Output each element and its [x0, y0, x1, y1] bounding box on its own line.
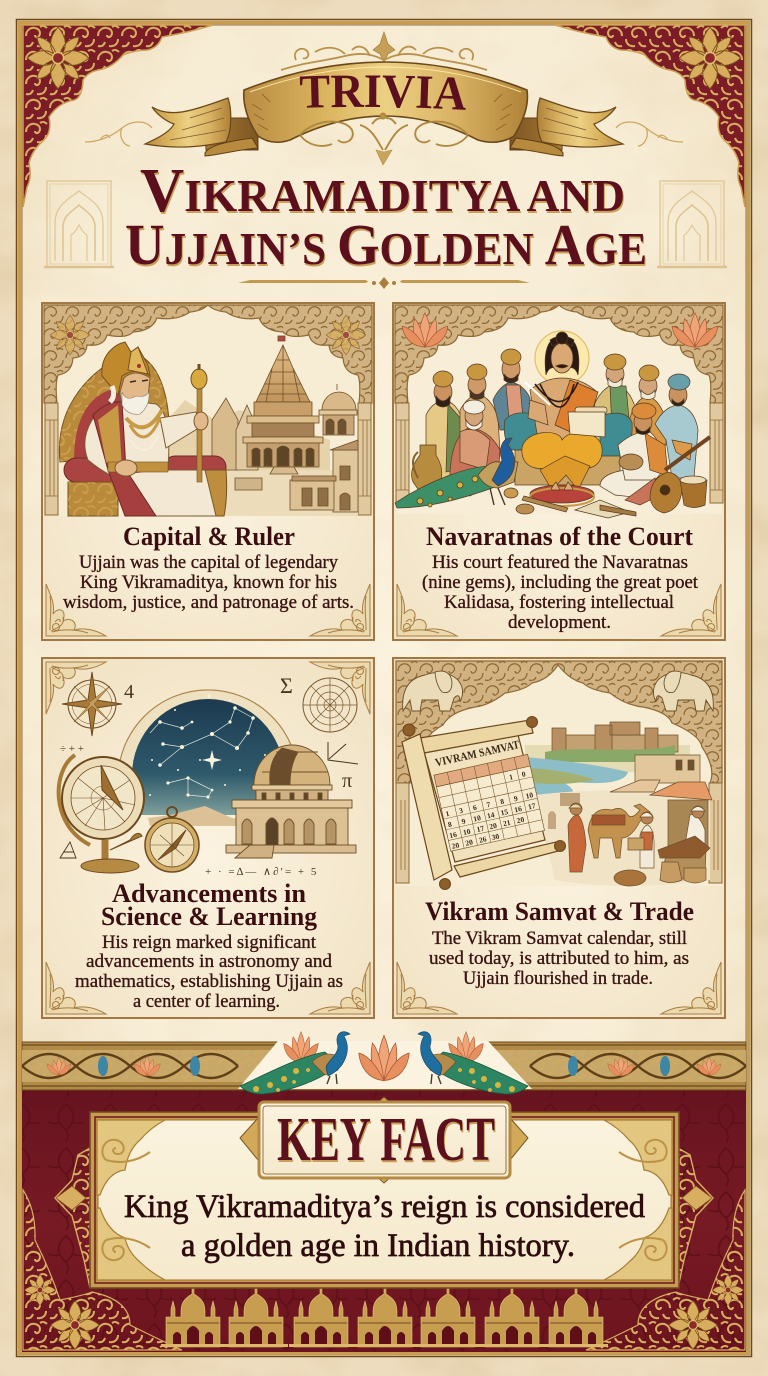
corner floral bottom right [586, 1190, 745, 1350]
skyline of palaces [161, 1283, 608, 1347]
illustration: Ujjain fort, river and market [525, 722, 712, 886]
body text [75, 932, 343, 1012]
Vikram Samvat scroll calendar [402, 716, 566, 890]
body text: King Vikramaditya, known for his [80, 572, 337, 593]
body text: His reign marked significant [102, 932, 317, 953]
key fact heading: KEY FACT [277, 1106, 495, 1174]
calendar grid: 21 [502, 818, 512, 828]
math symbols: + · =∆— ∧∂ʹ= + 5 [205, 866, 318, 878]
corner ornaments [397, 962, 721, 1014]
arch frame with elephants [396, 661, 722, 886]
math symbols: 4 [124, 681, 134, 703]
wind rose [62, 672, 122, 736]
body text: Ujjain flourished in trade. [463, 968, 653, 989]
calendar grid: 20 [516, 815, 525, 825]
key fact panel [90, 1112, 679, 1288]
corner ornaments [46, 662, 370, 1014]
body text: Kalidasa, fostering intellectual [444, 592, 674, 613]
corner ornaments [46, 584, 370, 636]
large centre lotus [359, 1036, 409, 1080]
corner ornaments [397, 584, 721, 636]
elephant left [403, 671, 463, 711]
low seat [515, 450, 620, 485]
panel: Vikram Samvat & Trade [393, 658, 725, 1018]
calendar grid: 9 [461, 816, 467, 826]
title divider [238, 277, 530, 289]
lute and drum [665, 437, 710, 470]
panel: Capital & Ruler [42, 303, 374, 640]
peacock [395, 466, 498, 508]
corner floral bottom left [23, 1190, 182, 1350]
ribbon centre band [244, 62, 527, 142]
calendar grid: 8 [447, 820, 453, 829]
body text: used today, is attributed to him, as [429, 948, 689, 969]
observatory [226, 745, 356, 858]
calendar grid [430, 738, 545, 851]
title line two: UJJAIN’S GOLDEN AGE [125, 212, 647, 277]
calendar grid: 26 [478, 834, 488, 845]
side scrollwork left [55, 1148, 90, 1288]
seated elder [450, 428, 500, 496]
calendar grid: 7 [486, 800, 491, 809]
calendar grid: 14 [486, 810, 496, 820]
calendar grid: 10 [472, 813, 482, 824]
body text: Ujjain was the capital of legendary [79, 552, 338, 573]
central poet [530, 378, 597, 440]
arch motif left [44, 181, 114, 267]
peacock left [240, 1032, 350, 1094]
heading: Capital & Ruler [123, 522, 295, 551]
body text: mathematics, establishing Ujjain as [75, 971, 343, 992]
distant caravan [560, 793, 580, 806]
key fact plaque [240, 1097, 528, 1183]
heading: Vikram Samvat & Trade [425, 897, 694, 926]
flourish below ribbon [300, 114, 468, 165]
heading: Advancements in [112, 879, 307, 908]
calendar grid: 15 [500, 807, 509, 817]
flourish above ribbon [281, 32, 487, 70]
camel [588, 804, 650, 858]
panel: key fact maroon section [22, 1090, 746, 1352]
star dome [118, 690, 300, 826]
arch frame [395, 305, 723, 514]
illustration: astronomy and observatory [59, 672, 358, 878]
key fact statement: a golden age in Indian history. [181, 1228, 575, 1264]
panel: Navaratnas of the Court [393, 303, 725, 640]
standing courtiers left [426, 400, 462, 482]
body text [422, 552, 699, 633]
calendar grid: 8 [499, 797, 505, 806]
body text [429, 928, 689, 989]
small lotus right [449, 1032, 483, 1062]
title line one: VIKRAMADITYA AND [140, 157, 625, 225]
throne [59, 352, 169, 462]
body text: His court featured the Navaratnas [432, 552, 688, 573]
calendar grid: 1 [445, 809, 450, 818]
calendar grid: 9 [513, 794, 519, 803]
title ribbon [143, 61, 625, 156]
math symbols: Σ [280, 673, 293, 698]
body text: advancements in astronomy and [86, 951, 332, 972]
calendar grid: 30 [491, 832, 500, 842]
calendar grid: 10 [525, 790, 534, 801]
calendar grid: 0 [521, 769, 527, 779]
side flourish right [616, 122, 683, 146]
small lotus left [284, 1032, 318, 1062]
side scrollwork right [678, 1148, 713, 1288]
heading: Science & Learning [101, 902, 317, 931]
corner ornament: top left [23, 25, 213, 207]
heading: Navaratnas of the Court [426, 522, 693, 551]
arch motif right [657, 181, 727, 267]
body text: wisdom, justice, and patronage of arts. [63, 592, 354, 613]
calendar grid: 20 [488, 821, 498, 831]
calendar grid: 16 [448, 830, 458, 840]
math symbols: π [342, 770, 352, 792]
merchants [568, 815, 586, 872]
compass [145, 807, 199, 872]
floor objects [522, 496, 568, 512]
ribbon left tail [145, 98, 258, 156]
temple [212, 336, 358, 512]
ribbon title text: TRIVIA [300, 76, 466, 110]
sceptre [197, 382, 202, 482]
calendar grid: 3 [458, 806, 464, 815]
polar grid [303, 678, 357, 732]
body text: development. [508, 612, 611, 633]
calendar grid: 16 [513, 804, 523, 814]
key fact statement [124, 1189, 645, 1264]
panel corner scrolls [97, 1120, 672, 1280]
standing courtiers right [592, 384, 636, 445]
jar [412, 445, 442, 492]
calendar grid: 1 [508, 772, 514, 782]
illustration: king and Ujjain temple [59, 336, 358, 516]
side flourish left [85, 122, 152, 146]
king [120, 470, 216, 516]
ribbon right tail [510, 98, 623, 156]
main title [125, 157, 647, 277]
calendar grid: 17 [527, 801, 537, 811]
peacock right [418, 1032, 528, 1094]
arch frame [44, 305, 372, 515]
sundial globe [59, 755, 144, 873]
key fact statement: King Vikramaditya’s reign is considered [124, 1189, 645, 1225]
body text: a center of learning. [133, 991, 280, 1012]
body text: The Vikram Samvat calendar, still [432, 928, 687, 949]
heading [101, 879, 317, 931]
calendar grid: 10 [462, 827, 472, 837]
panel: Advancements in Science & Learning [42, 658, 374, 1018]
calendar grid: 6 [472, 803, 478, 812]
ornamental lotus band [22, 1041, 746, 1090]
math symbols [60, 673, 358, 878]
calendar grid: 20 [464, 837, 474, 848]
body text [63, 552, 354, 613]
calendar grid: 17 [476, 824, 485, 834]
lotus and peacock crest [240, 1032, 528, 1094]
elephant right [653, 671, 713, 711]
calendar grid: VIVRAM SAMVAT [434, 739, 521, 769]
calendar grid: 20 [451, 840, 460, 851]
corner ornament: top right [555, 25, 745, 207]
spice stalls [658, 836, 710, 858]
illustration: the nine gems court [395, 331, 710, 518]
musician [600, 470, 660, 500]
body text: (nine gems), including the great poet [422, 572, 699, 593]
math symbols: ÷ + + [60, 743, 84, 755]
